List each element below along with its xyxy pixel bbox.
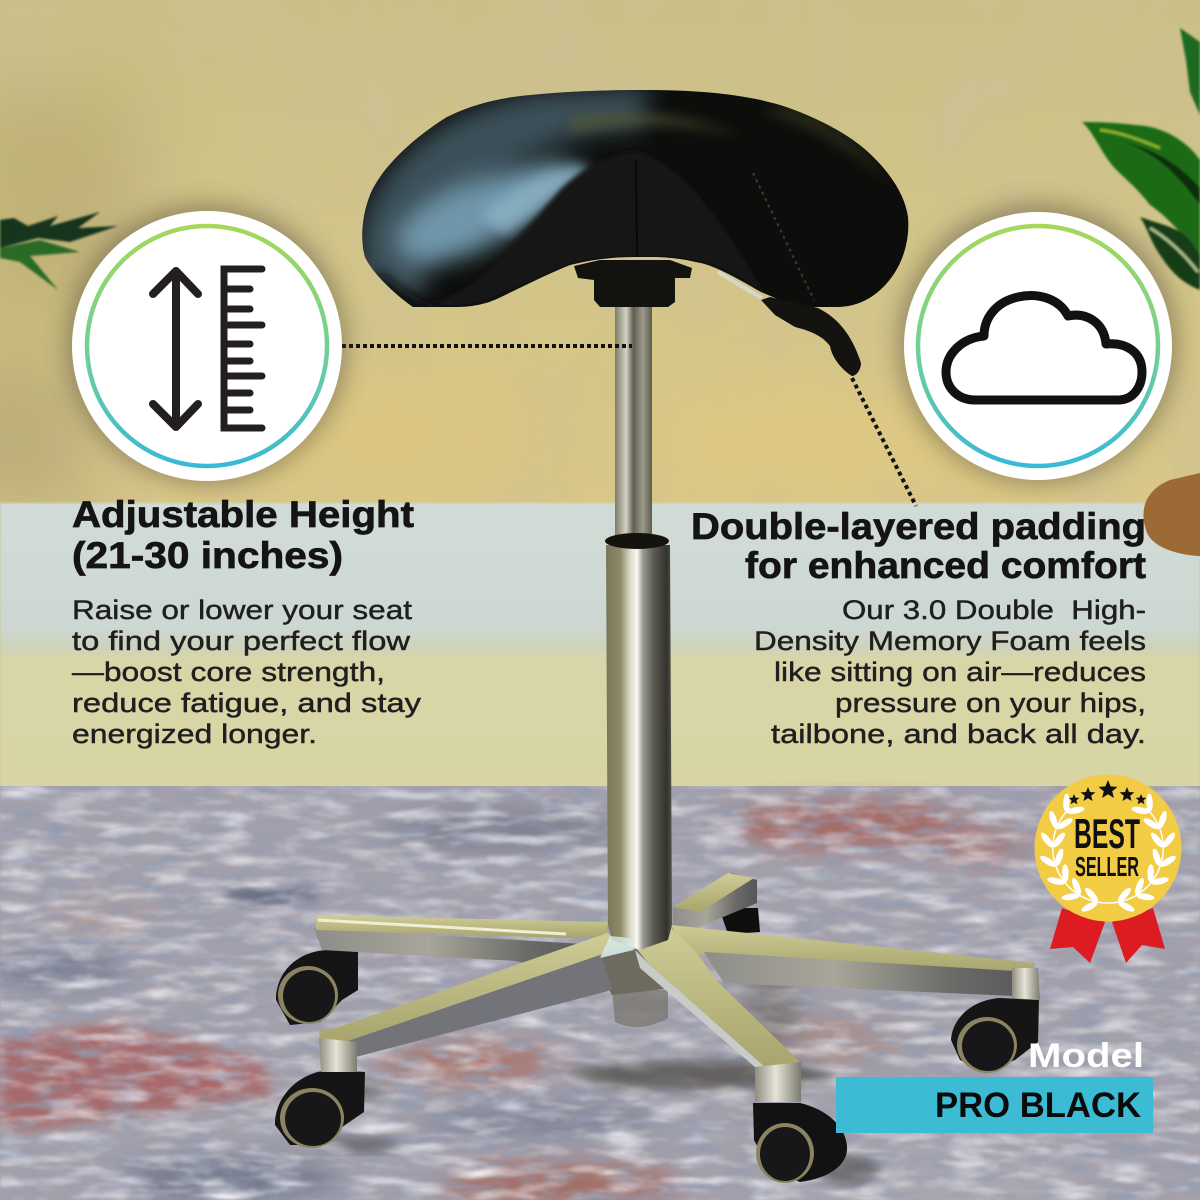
body copy [754,595,1146,749]
body copy: energized longer. [72,719,317,749]
base arm: front left [322,950,612,1058]
body copy: tailbone, and back all day. [771,719,1146,749]
laurel wreath [1037,791,1179,916]
model name bar: PRO BLACK [935,1086,1141,1125]
body copy: to find your perfect flow [72,626,411,656]
dotted connector: height [342,344,632,348]
lower sleeve [606,545,672,950]
upper pole [615,300,652,540]
body copy: Our 3.0 Double High- [842,595,1146,625]
caster: front left [275,1070,365,1148]
decoration: plant right [1082,28,1200,290]
gas cylinder foot [612,990,668,1027]
stars [1069,780,1146,804]
model heading: Model [1028,1037,1144,1075]
decoration: wooden table edge [1143,473,1200,556]
heading: Double-layered padding [691,506,1146,547]
ribbon right [1112,908,1165,963]
body copy: —boost core strength, [72,657,385,687]
caster: right [951,998,1039,1073]
badge label: BEST [1074,810,1140,857]
heading [691,506,1146,586]
body copy: Density Memory Foam feels [754,626,1146,656]
hub highlight [600,936,634,958]
sleeve collar [605,533,669,549]
model label [836,1037,1153,1133]
badge label: SELLER [1075,851,1139,882]
heading [72,494,414,576]
background: yellow plaster wall [0,0,1200,520]
body copy: pressure on your hips, [835,688,1146,718]
hub underside [592,948,700,995]
icon: cloud [946,296,1142,400]
text block: double-layered padding [691,506,1146,749]
decoration: plant left [0,212,118,290]
base arm: rear left [314,928,600,970]
base arm: front right [635,950,765,1067]
model name bar [836,1077,1153,1133]
body copy [72,595,422,749]
seat lever [761,297,861,376]
adjustment rod [718,272,762,298]
base arm: rear right [672,873,757,932]
caster: front right [753,1103,847,1183]
shadow of stool on rug [305,970,880,1184]
stool [275,80,1040,1183]
caster: rear left [276,950,358,1025]
background: pale baseboard and lower wall [0,503,1200,798]
badge label [1074,810,1140,882]
base arm: right [699,945,1038,997]
circle shadows [67,204,1178,484]
heading: (21-30 inches) [72,535,343,576]
ribbon left [1050,908,1105,963]
rear-right caster [719,908,760,934]
body copy: Raise or lower your seat [72,595,413,625]
icon badge: padding comfort [904,212,1172,480]
seat mount [574,260,692,307]
heading: Adjustable Height [72,494,414,535]
saddle seat [362,90,908,307]
body copy: reduce fatigue, and stay [72,688,422,718]
text block: adjustable height [72,494,422,749]
background: patterned rug [0,786,1200,1200]
icon: ruler [224,269,262,428]
medal [1034,774,1182,922]
dotted connector: padding [852,378,916,506]
heading: for enhanced comfort [745,545,1146,586]
body copy: like sitting on air—reduces [774,657,1146,687]
icon badge: adjustable height [72,211,342,481]
icon: up-down arrow [153,271,198,427]
best seller badge [1034,774,1182,963]
